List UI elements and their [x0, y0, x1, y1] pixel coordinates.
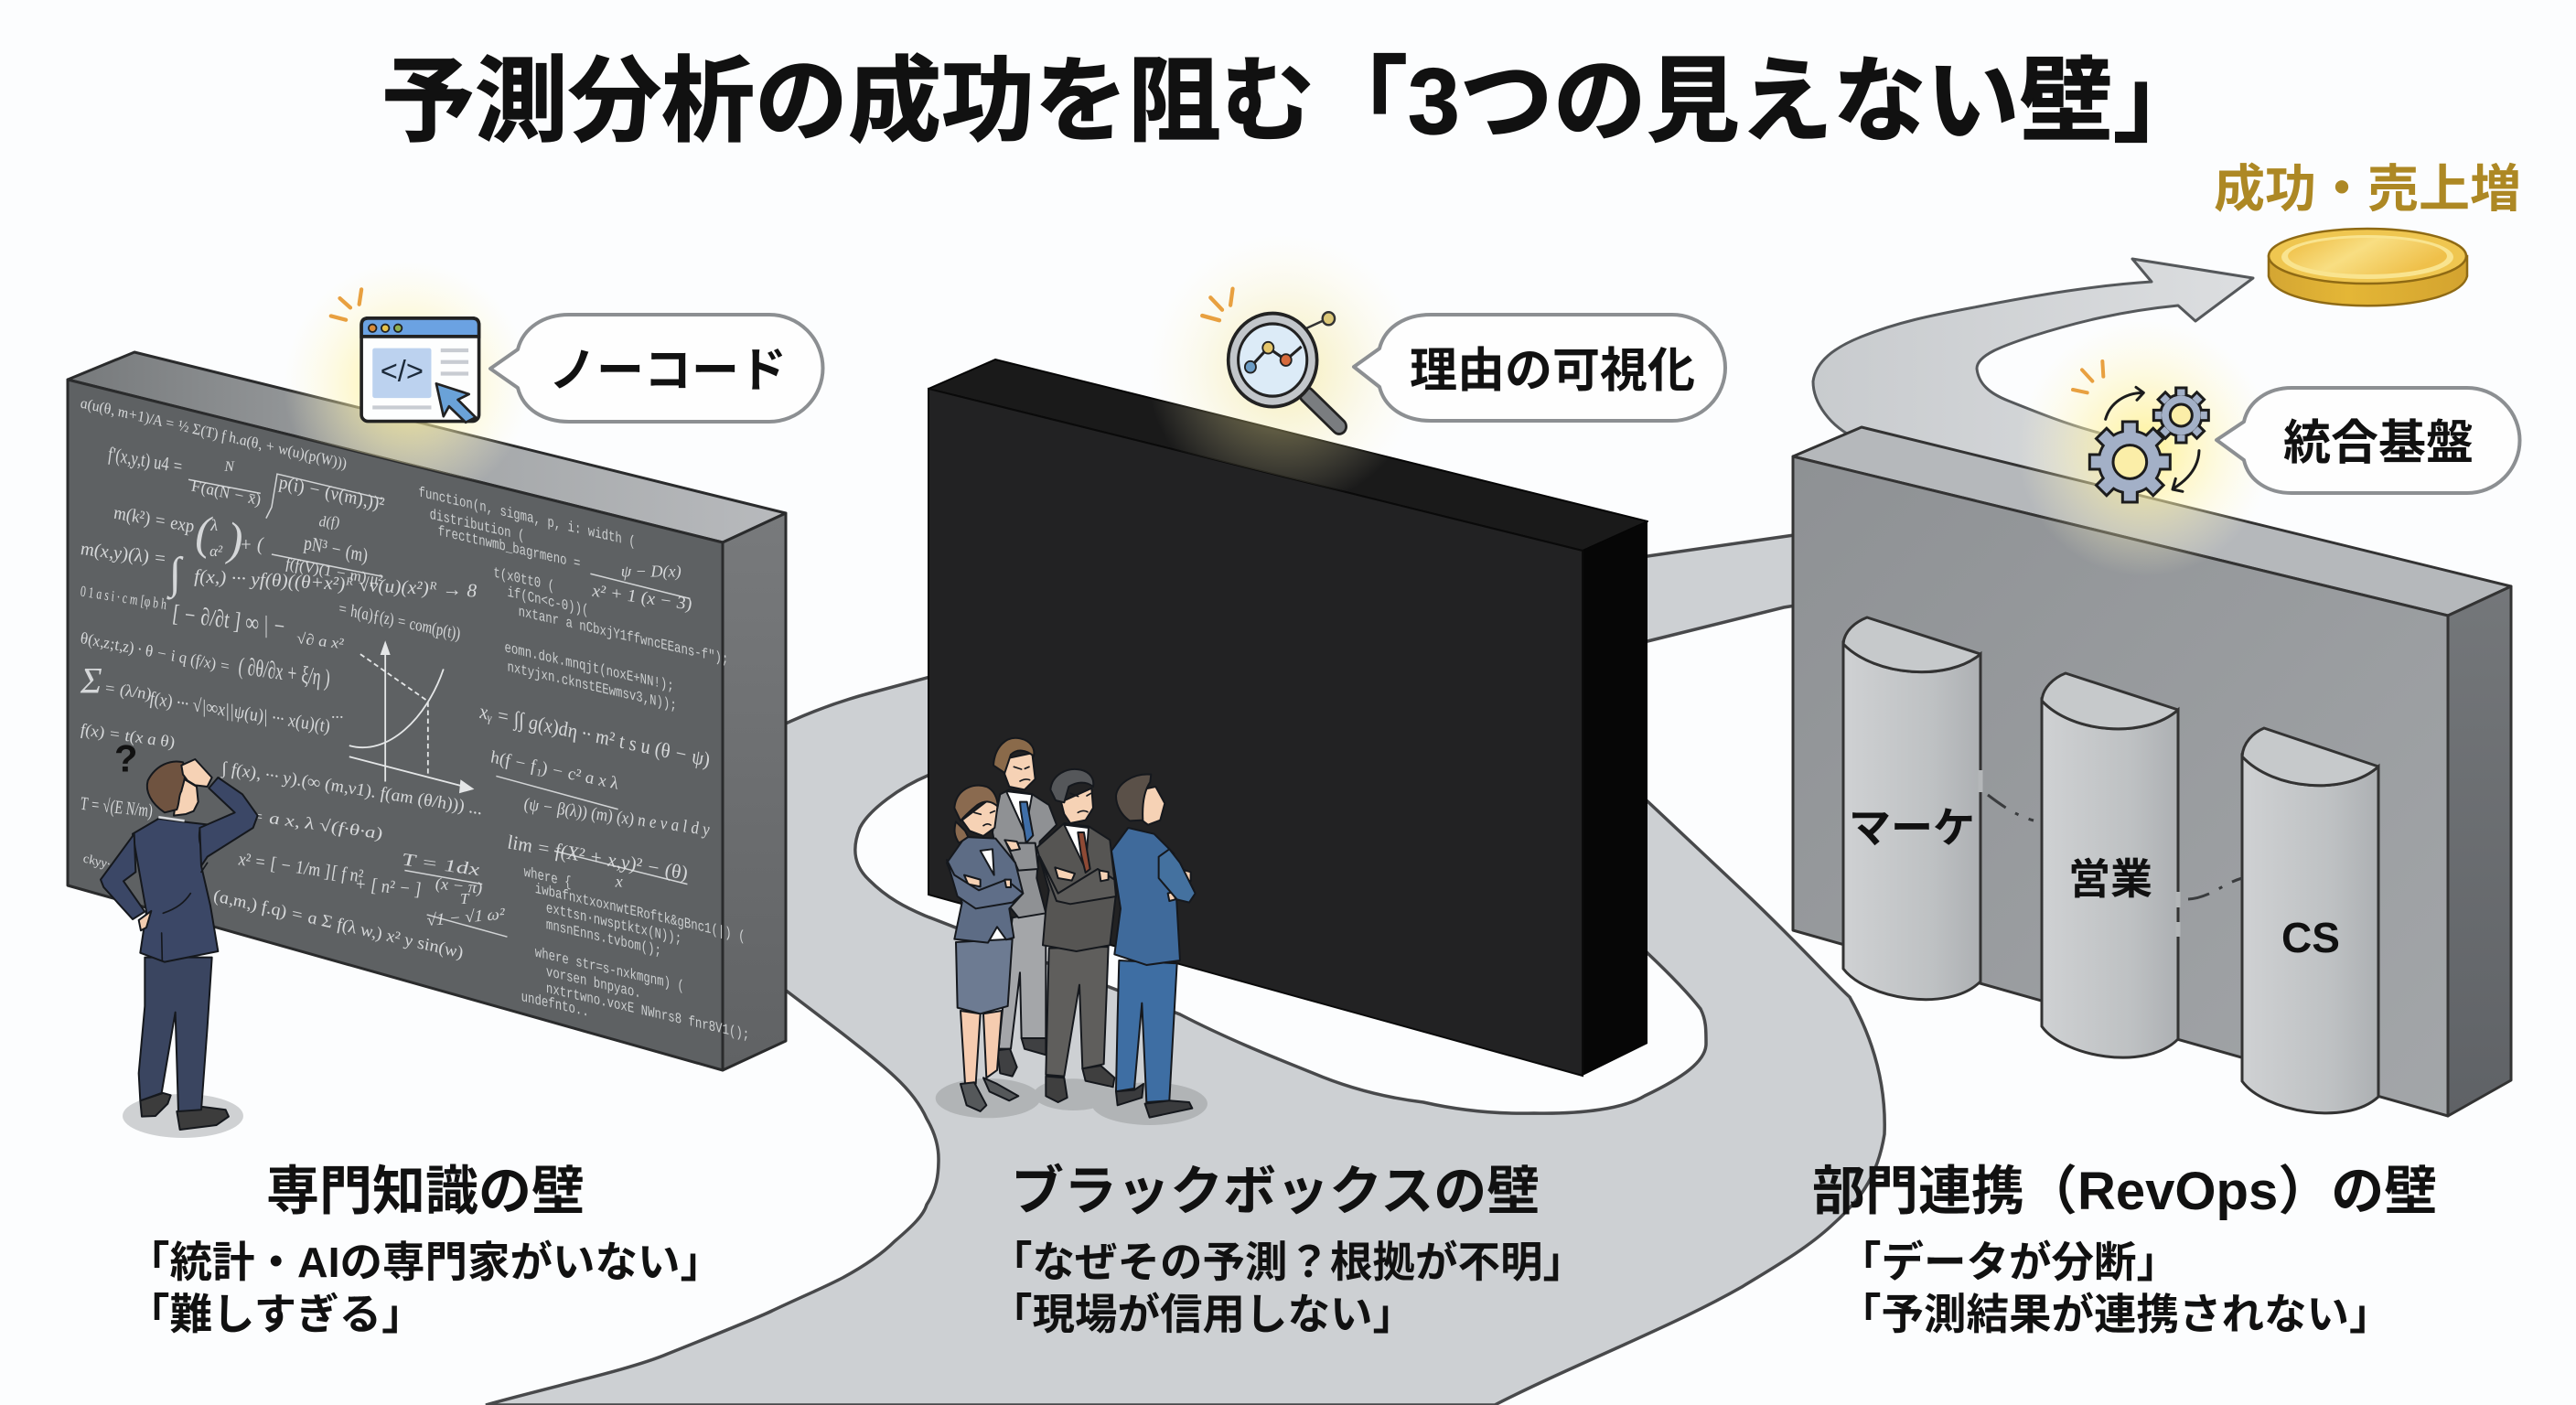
road to success: [486, 259, 2253, 1405]
bubble: integration platform: 統合基盤: [2283, 417, 2474, 470]
chalk formulas: h(f − f₁) − c² a x λ: [490, 747, 618, 794]
wall front: [68, 380, 723, 1070]
chalk formulas: eomn.dok.mnqjt(noxE+NN!);: [504, 640, 674, 695]
chalk formulas: (a,m,) f.q) = a Σ f(λ w,) x² y sin(w): [213, 885, 463, 963]
caption: RevOps: 「データが分断」: [1839, 1239, 2179, 1286]
man in front: [1111, 775, 1196, 1118]
chalk formulas: √1 − √1 ω²: [427, 905, 505, 929]
chalk formulas: ∫: [166, 549, 184, 599]
hand on head: [181, 759, 212, 787]
fraction bars and roots: [188, 474, 690, 937]
title: 予測分析の成功を阻む「3つの見えない壁」: [381, 49, 2206, 154]
woman: [947, 786, 1023, 1111]
chalk formulas: = h(a)ƒ(z) = com(p(t)): [338, 599, 460, 644]
wall side: [2448, 586, 2511, 1116]
man at back: [993, 738, 1057, 1077]
chalk formulas: α²: [209, 542, 223, 560]
silo: marketing: [1843, 617, 1980, 1000]
glow: visualisation: [1159, 263, 1387, 488]
silo: CS: CS: [2281, 914, 2340, 961]
chalk formulas: θ(x,z;t,z) · θ − i q (f/x) =: [80, 628, 230, 677]
caption: RevOps: [1812, 1162, 2437, 1338]
hair: [147, 761, 185, 812]
chalk formulas: iwbafnxtxoxnwtERoftk&gBnc1(|) (: [535, 882, 746, 946]
chalk formulas: vorsen bnpyao.: [546, 964, 641, 1003]
chalk formulas: = (λ/n): [104, 679, 151, 704]
trousers: [139, 958, 212, 1111]
icon: no-code window: [331, 289, 479, 423]
caption: black box: 「なぜその予測？根拠が不明」: [990, 1239, 1585, 1286]
caption: black box: 「現場が信用しない」: [990, 1291, 1415, 1338]
broken link marks: [1988, 795, 2242, 899]
wall top: [68, 352, 786, 542]
caption: expert knowledge: 「難しすぎる」: [127, 1291, 424, 1338]
silo: CS: [2242, 728, 2378, 1113]
group of four staff: [936, 738, 1208, 1125]
man in centre: [1036, 769, 1116, 1102]
chalk formulas: lim = f(X² + x,y)² − (θ): [507, 830, 687, 885]
glow: no-code: [289, 279, 512, 481]
caption: RevOps: 部門連携（RevOps）の壁: [1812, 1162, 2437, 1221]
silo: sales: 営業: [2068, 855, 2152, 903]
wall front: [928, 389, 1583, 1076]
icon: gears: [2073, 361, 2208, 502]
wall front: [1793, 456, 2448, 1116]
hand on hip: [139, 911, 151, 930]
chalk formulas: f(x) ··· √|∞x||ψ(u)| ··· x(u)(t): [150, 689, 330, 737]
chalk formulas: nxtrtwno.voxE NWnrs8 fnr8V1();: [546, 981, 749, 1045]
chalk formulas: function(n, sigma, p, i: width (: [419, 485, 636, 552]
chalk formulas: [80, 394, 749, 1045]
chalk formulas: mnsnEnns.tvbom();: [546, 917, 661, 960]
wall top: [1793, 427, 2511, 616]
gold coin: [2269, 229, 2467, 306]
chalk formulas: ψ − D(x): [621, 562, 682, 581]
icon: magnifier with chart: [1202, 289, 1339, 426]
chalk formulas: ): [224, 514, 242, 565]
success label: 成功・売上増: [2214, 160, 2521, 218]
chalk formulas: F(a(N − x̄): [190, 476, 261, 509]
chalk formulas: exttsn·nwsptktx(N));: [546, 901, 682, 949]
chalk formulas: d(f): [318, 515, 339, 531]
caption: expert knowledge: 専門知識の壁: [266, 1162, 585, 1221]
chalk formulas: T: [460, 890, 470, 907]
caption: black box: [990, 1162, 1585, 1338]
wall side: [723, 513, 786, 1070]
chalk formulas: f(x) = t(x a θ): [80, 720, 175, 752]
shadow: [123, 1094, 243, 1138]
chalk formulas: N: [223, 459, 235, 475]
chalk formulas: λ: [209, 516, 218, 534]
chalk formulas: ∫ f(x), ··· y).(∞ (m,v1). f(am (θ/h))) ...: [220, 758, 482, 820]
chalk formulas: √∂ a x²: [296, 629, 345, 652]
jacket seams: [162, 830, 208, 960]
chalk formulas: x² + 1 (x − 3): [591, 581, 692, 615]
chalk formulas: x: [615, 873, 623, 891]
chalk formulas: ckyy·φ·w: [83, 852, 130, 877]
glow: integration: [2017, 320, 2273, 576]
chalk formulas: where {: [524, 864, 572, 892]
caption: black box: ブラックボックスの壁: [1011, 1162, 1540, 1221]
chalk formulas: t(x0tt0 (: [493, 565, 554, 595]
question mark: ?: [114, 736, 137, 779]
chalk formulas: ...: [331, 703, 344, 722]
wall side: [1583, 521, 1648, 1076]
chalk formulas: ( ∂θ/∂x + ξ/η ): [239, 651, 330, 692]
arm on hip: [101, 834, 145, 919]
chalk formulas: (: [195, 509, 213, 560]
wall top: [928, 359, 1648, 551]
bubble: no-code: [490, 315, 823, 422]
chalk formulas: 0 1 a s i · c m [φ b h: [80, 583, 166, 613]
chalk formulas: p(i) − (v(m),))²: [277, 470, 385, 515]
bubble: reason visualisation: [1354, 315, 1725, 421]
white island under the black wall: [855, 765, 1706, 1113]
arrow to coin: [1813, 259, 2253, 512]
chalk formulas: distribution (: [430, 507, 524, 545]
chalk graph: [349, 643, 472, 792]
chalk formulas: f'(x,y,t) u4 =: [108, 442, 183, 477]
bubble: integration platform: [2216, 388, 2519, 493]
chalk formulas: T = 1dx: [402, 850, 480, 880]
chalk formulas: + [ n² − ]: [355, 874, 422, 900]
jacket body: [133, 819, 218, 962]
chalk formulas: (ψ − β(λ)) (m) (x) n e v a l d y: [524, 795, 710, 840]
chalk formulas: Σ: [80, 660, 102, 702]
chalk formulas: = a x, λ √(f·θ·a): [250, 806, 382, 843]
chalk formulas: T = √(E N/m): [80, 794, 153, 821]
chalk formulas: x² = [ − 1/m ][ f n²: [238, 849, 364, 887]
chalk formulas: if(Cn<c-0))(: [507, 585, 588, 620]
chalk formulas: a(u(θ, m+1)/A = ½ Σ(T) f h.a(θ, + w(u)(p(W))): [80, 394, 347, 473]
chalk formulas: + (: [240, 535, 264, 555]
wall 1: expert knowledge: [68, 352, 786, 1070]
bubble: no-code: ノーコード: [549, 345, 787, 398]
silo: marketing: マーケ: [1849, 804, 1975, 852]
shadows: [936, 1078, 1208, 1125]
raised arm: [199, 778, 258, 866]
person: confused man: [101, 736, 258, 1138]
chalk formulas: where str=s-nxkmgnm) (: [535, 945, 684, 996]
face: [174, 778, 199, 816]
chalk formulas: f(x,) ··· yf(θ)((θ+x²)ᴿ √v(u)(x²)ᴿ → 8: [194, 566, 478, 602]
chalk formulas: frecttnwmb_bagrmeno =: [438, 524, 580, 573]
chalk formulas: m(k²) = exp: [113, 503, 194, 537]
chalk formulas: undefnto..: [521, 990, 589, 1022]
icon: no-code window: </>: [381, 353, 424, 387]
chalk formulas: (x − π): [435, 874, 482, 898]
caption: expert knowledge: [127, 1162, 723, 1338]
bubble: reason visualisation: 理由の可視化: [1410, 345, 1695, 398]
chalk formulas: nxtyjxn.cknstEEwmsv3,N));: [507, 660, 677, 715]
wall 3: department silos: [1793, 427, 2511, 1116]
caption: expert knowledge: 「統計・AIの専門家がいない」: [127, 1239, 723, 1286]
chalk formulas: nxtanr a nCbxjY1ffwncEEans-f");: [519, 605, 728, 669]
chalk formulas: f(f(V)(1 − m) μ²: [285, 554, 383, 589]
collar: [158, 817, 185, 820]
chalk formulas: xᵧ = ∫∫ g(x)dη ·· m² t s u (θ − ψ): [478, 700, 710, 773]
chalk formulas: [ − ∂/∂t ] ∞ | −: [172, 599, 285, 640]
road surface: [486, 533, 1884, 1405]
shoes: [140, 1093, 229, 1130]
silo: sales: [2042, 673, 2178, 1057]
caption: RevOps: 「予測結果が連携されない」: [1839, 1291, 2391, 1338]
chalk formulas: m(x,y)(λ) =: [80, 539, 166, 570]
chalk formulas: pN³ − (m): [303, 531, 368, 567]
wall 2: black box: [928, 359, 1648, 1076]
